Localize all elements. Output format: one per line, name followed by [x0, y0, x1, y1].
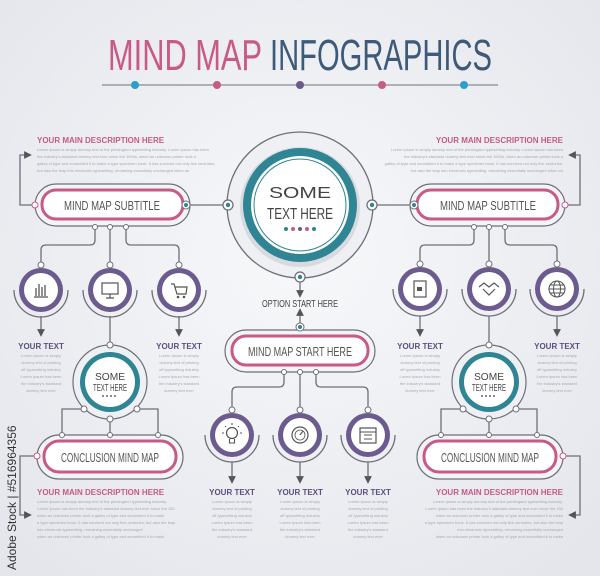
central circle: SOME [269, 185, 331, 202]
central circle: TEXT HERE [267, 206, 333, 223]
text block: left bottom description: a type specimen book. It has survived not only five centuries, but also the leap [37, 520, 176, 525]
your text blocks: Lorem Ipsum is simply [212, 499, 252, 504]
text block: left bottom description: when an unknown printer took a galley of type and scrambled it to make [37, 534, 165, 539]
your text blocks: off typesetting industry [537, 367, 577, 372]
icon: bar chart [14, 262, 68, 317]
your text blocks: dummy text ever [405, 388, 435, 393]
your text blocks: dummy text ever [26, 388, 56, 393]
your text blocks: the industry's standard [537, 381, 577, 386]
small circle: right some text here: SOME [474, 372, 504, 383]
text block: left main description: galley of type and scrambled it to make a type specimen book. It has survived not only five centuries, [37, 161, 215, 166]
text block: right main description: galley of type and scrambled it to make a type specimen book. It has survived not only five centuries, [385, 161, 563, 166]
your text blocks: YOUR TEXT [345, 488, 391, 497]
your text blocks: the industry's standard [400, 381, 440, 386]
your text blocks: dummy text ever [285, 534, 315, 539]
your text blocks: the industry's standard [21, 381, 61, 386]
text block: right main description: but also the leap into electronic typesetting, remaining essentially unchanged when an [411, 168, 563, 173]
text block: left bottom description: Lorem Ipsum has been the industry's standard dummy text ever since the 150 [37, 506, 176, 511]
pill: right subtitle [410, 184, 568, 230]
icon: calendar [341, 407, 395, 462]
your text blocks: Lorem Ipsum is simply [537, 353, 577, 358]
text block: right bottom description: when an unknown printer took a galley of type and scrambled it to make [436, 513, 564, 518]
your text blocks: off typesetting industry [400, 367, 440, 372]
text block: right main description [385, 136, 564, 173]
title: INFOGRAPHICS [270, 31, 492, 80]
your text blocks: dummy text of printing [348, 506, 388, 511]
title: MIND MAP [108, 31, 262, 80]
your text blocks: Lorem Ipsum has been [400, 374, 440, 379]
text block: left bottom description: when an unknown printer took a galley of type and scrambled it to make [37, 513, 165, 518]
your text blocks: Lorem Ipsum has been [159, 374, 199, 379]
your text blocks: YOUR TEXT [397, 342, 443, 351]
text block: right bottom description: Lorem Ipsum has been the industry's standard dummy text ever since the 150 [425, 506, 564, 511]
text block: left main description [37, 136, 215, 173]
pill: left subtitle: MIND MAP SUBTITLE [64, 198, 160, 213]
text block: right bottom description: a type specimen book. It has survived not only five centuries, but also the leap [425, 520, 564, 525]
small circle: left some text here [73, 342, 147, 422]
your text blocks: off typesetting industry [212, 513, 252, 518]
your text blocks: Lorem Ipsum is simply [21, 353, 61, 358]
your text blocks: YOUR TEXT [18, 342, 64, 351]
your text blocks: the industry's standard [212, 527, 252, 532]
your text blocks: Lorem Ipsum has been [348, 520, 388, 525]
your text blocks: Lorem Ipsum is simply [400, 353, 440, 358]
text block: right bottom description: into electronic typesetting, remaining essentially unchanged [457, 527, 563, 532]
your text blocks: the industry's standard [159, 381, 199, 386]
connectors [20, 155, 580, 515]
icon: bulb [205, 407, 259, 462]
your text blocks: off typesetting industry [280, 513, 320, 518]
your text blocks: dummy text of printing [212, 506, 252, 511]
your text blocks: dummy text ever [542, 388, 572, 393]
pill: mind map start [225, 323, 375, 374]
text block: left main description: YOUR MAIN DESCRIPTION HERE [37, 136, 165, 145]
your text blocks: YOUR TEXT [156, 342, 202, 351]
small circle: left some text here: SOME [95, 372, 125, 383]
your text blocks: dummy text of printing [280, 506, 320, 511]
your text blocks: Lorem Ipsum is simply [348, 499, 388, 504]
your text blocks: dummy text of printing [400, 360, 440, 365]
your text blocks [18, 342, 580, 539]
your text blocks: the industry's standard [348, 527, 388, 532]
your text blocks: dummy text ever [217, 534, 247, 539]
your text blocks: off typesetting industry [159, 367, 199, 372]
text block: right bottom description: Lorem Ipsum is simply dummy text of the printingand typesetting industry. [433, 499, 563, 504]
watermark strip: Adobe Stock | #516964356 [5, 425, 19, 570]
icon: book [393, 261, 447, 316]
your text blocks: Lorem Ipsum has been [537, 374, 577, 379]
small circle: right some text here [452, 342, 526, 422]
your text blocks: Lorem Ipsum has been [212, 520, 252, 525]
pill: left conclusion [34, 432, 183, 479]
your text blocks: YOUR TEXT [277, 488, 323, 497]
icon: cart [152, 262, 206, 317]
central circle [223, 132, 377, 282]
icon: globe [530, 261, 584, 316]
your text blocks: Lorem Ipsum is simply [159, 353, 199, 358]
text block: right bottom description: when an unknown printer took a galley of type and scrambled it to make [436, 534, 564, 539]
text block: right bottom description [425, 488, 564, 539]
text block: left bottom description: YOUR MAIN DESCRIPTION HERE [37, 488, 165, 497]
your text blocks: Lorem Ipsum is simply [280, 499, 320, 504]
option start label: OPTION START HERE [262, 299, 338, 310]
pill: right conclusion: CONCLUSION MIND MAP [441, 450, 539, 465]
text block: left bottom description [37, 488, 176, 539]
text block: left main description: Lorem Ipsum is simply dummy text of the printingand typesetting industry. Lorem Ipsum has been [37, 147, 209, 152]
text block: right bottom description: YOUR MAIN DESCRIPTION HERE [436, 488, 564, 497]
small circle: left some text here: TEXT HERE [93, 383, 127, 394]
text block: left main description: the industry's standard dummy text ever since the 1500s, when an unknown printer took a [37, 154, 197, 159]
pill: right conclusion [417, 432, 566, 479]
text block: right main description: the industry's standard dummy text ever since the 1500s, when an unknown printer took a [404, 154, 564, 159]
your text blocks: dummy text ever [164, 388, 194, 393]
text block: left bottom description: into electronic typesetting, remaining essentially unchanged [37, 527, 143, 532]
pill: right subtitle: MIND MAP SUBTITLE [440, 198, 536, 213]
icon: gauge [273, 407, 327, 462]
your text blocks: off typesetting industry [21, 367, 61, 372]
icon: monitor [83, 262, 137, 317]
icon circles: bar chart, monitor, cart, book, handshake, globe, bulb, gauge, calendar [14, 261, 584, 462]
your text blocks: the industry's standard [280, 527, 320, 532]
title underline with dots [102, 81, 498, 89]
your text blocks: Lorem Ipsum has been [21, 374, 61, 379]
your text blocks: dummy text of printing [159, 360, 199, 365]
icon: handshake [462, 261, 516, 316]
your text blocks: dummy text of printing [21, 360, 61, 365]
pill: mind map start: MIND MAP START HERE [248, 344, 352, 359]
text block: left main description: but also the leap into electronic typesetting, remaining essentially unchanged when an [37, 168, 189, 173]
your text blocks: dummy text of printing [537, 360, 577, 365]
your text blocks: YOUR TEXT [534, 342, 580, 351]
your text blocks: off typesetting industry [348, 513, 388, 518]
text block: right main description: YOUR MAIN DESCRIPTION HERE [436, 136, 564, 145]
your text blocks: dummy text ever [353, 534, 383, 539]
title [108, 31, 492, 80]
text block: right main description: Lorem Ipsum is simply dummy text of the printingand typesetting industry. Lorem Ipsum has been [391, 147, 563, 152]
small circle: right some text here: TEXT HERE [472, 383, 506, 394]
pill: left conclusion: CONCLUSION MIND MAP [61, 450, 159, 465]
your text blocks: Lorem Ipsum has been [280, 520, 320, 525]
pill: left subtitle [32, 184, 190, 230]
your text blocks: YOUR TEXT [209, 488, 255, 497]
text block: left bottom description: Lorem Ipsum is simply dummy text of the printingand typesetting industry. [37, 499, 167, 504]
